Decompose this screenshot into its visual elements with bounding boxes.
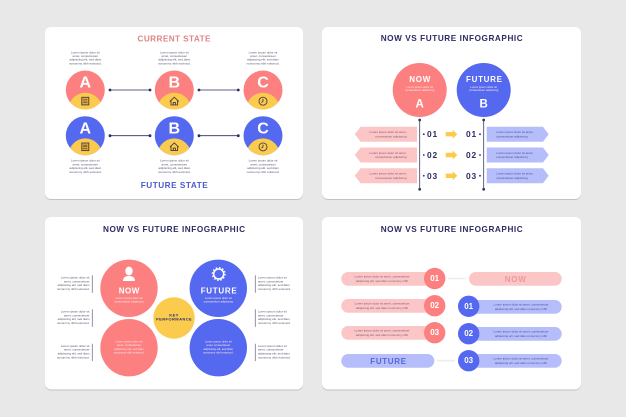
badge: future A: A [80,120,92,137]
right side notes: Lorem ipsum dolor sit [258,344,287,348]
circle: now detail: adipiscing elit, sed diam [114,347,145,351]
text block: top descriptions: nonummy nibh euismod. [158,61,191,65]
right blue pills: Lorem ipsum dolor sit amet, consectetuer [493,356,549,360]
heading: current state: CURRENT STATE [138,34,211,43]
left pink pills: Lorem ipsum dolor sit amet, consectetuer [354,328,410,332]
text block: top descriptions: adipiscing elit, sed diam [247,58,279,62]
circle: now A [393,63,447,117]
text block: top descriptions: Lorem ipsum dolor sit [249,50,278,54]
label pill: now: NOW [505,275,526,284]
circle: now: NOW [119,286,140,295]
text block: bottom descriptions: nonummy nibh euismod. [247,170,280,174]
right side notes: nonummy nibh euismod. [258,287,291,291]
badge: current B [154,70,194,110]
badge: future A [66,116,105,156]
icon: person [123,267,135,281]
title: NOW VS FUTURE INFOGRAPHIC [381,225,523,234]
circle: now: consectetuer adipiscing [114,299,144,303]
circle: now detail: nonummy nibh euismod. [114,351,144,355]
text block: bottom descriptions: adipiscing elit, sed diam [247,166,279,170]
text block: bottom descriptions: nonummy nibh euismod. [69,170,102,174]
numbers: 02 [466,150,477,160]
circle: future: consectetuer adipiscing [204,299,233,303]
text block: top descriptions: nonummy nibh euismod. [247,61,280,65]
left arrow labels: consectetuer adipiscing [375,134,407,138]
label pill: future: FUTURE [370,357,407,366]
circle: future B: FUTURE [466,75,503,84]
number circles: now [424,268,445,343]
numbers [427,129,477,181]
right arrow labels [487,127,549,183]
circle: now detail: amet, consectetuer [117,343,141,347]
badge: current B: B [169,75,180,92]
numbers: 02 [427,150,438,160]
badge: current A: A [80,75,92,92]
text block: bottom descriptions: amet, consectetuer [250,162,276,166]
number circles: now: 02 [430,301,440,310]
left arrow labels: consectetuer adipiscing [375,155,407,159]
left arrow labels [355,127,417,183]
left pink pills [341,272,434,340]
icon: clock [259,143,267,151]
left side notes: nonummy nibh euismod. [57,287,90,291]
title: NOW VS FUTURE INFOGRAPHIC [381,34,523,43]
right blue pills [469,300,562,368]
right blue pills: Lorem ipsum dolor sit amet, consectetuer [493,302,549,306]
badge: current C [244,70,282,110]
text block: top descriptions [69,50,280,65]
badge: future C [244,116,282,156]
numbers: 03 [427,171,438,181]
number circles: now: 01 [430,274,440,283]
numbers: 01 [466,129,477,139]
text block: bottom descriptions: Lorem ipsum dolor sit [71,159,100,163]
circle: key performance: KEY [169,312,179,317]
badge: future C: C [257,120,269,137]
left side notes: adipiscing elit, sed diam [58,352,90,356]
text block: top descriptions: adipiscing elit, sed diam [158,58,191,62]
text block: top descriptions: Lorem ipsum dolor sit [71,50,100,54]
text block: bottom descriptions [69,159,280,174]
left pink pills: adipiscing elit, sed diam nonummy nibh [356,306,409,310]
number dots [423,133,481,177]
numbers: 01 [427,129,438,139]
number circles: now: 03 [430,328,440,337]
circle: future detail: Lorem ipsum dolor sit [205,339,232,343]
circle: future detail: nonummy nibh euismod. [203,351,234,355]
left side notes: Lorem ipsum dolor sit [61,276,90,280]
badge: current C: C [257,75,269,92]
circle: now: Lorem ipsum dolor sit [116,296,143,300]
right arrow labels: Lorem ipsum dolor sit amet, [496,151,533,155]
text block: top descriptions: amet, consectetuer [162,54,187,58]
right side notes: amet, consectetuer [258,348,284,352]
badge: future B [154,116,194,156]
circle: now A: Lorem ipsum dolor sit [406,85,433,89]
left side notes: Lorem ipsum dolor sit [61,344,90,348]
right blue pills: adipiscing elit, sed diam nonummy nibh [495,334,548,338]
circle: now detail [100,319,158,376]
right side notes: adipiscing elit, sed diam [258,283,290,287]
left side notes: amet, consectetuer [64,279,90,283]
icon: house [170,97,179,105]
numbers: 03 [466,171,477,181]
right side notes: Lorem ipsum dolor sit [258,276,287,280]
circle: future B: Lorem ipsum dolor sit [470,85,497,89]
circle: now A: NOW [409,75,431,84]
left arrow labels: Lorem ipsum dolor sit amet, [369,151,407,155]
text block: bottom descriptions: Lorem ipsum dolor sit [160,159,189,163]
circle: future detail: adipiscing elit, sed diam [203,347,234,351]
icon: house [170,143,179,151]
right arrow labels: consectetuer adipiscing [496,176,528,180]
left side notes: adipiscing elit, sed diam [58,317,90,321]
right arrow labels: consectetuer adipiscing [496,155,528,159]
circle: future: Lorem ipsum dolor sit [205,296,232,300]
circle: key performance [153,297,195,339]
right side notes: adipiscing elit, sed diam [258,317,290,321]
circle: future B: consectetuer adipiscing [469,88,499,92]
circle: future: FUTURE [201,286,237,295]
text block: top descriptions: adipiscing elit, sed diam [69,58,102,62]
number circles: future: 03 [464,356,474,365]
right side notes: nonummy nibh euismod. [258,355,291,359]
icon: clock [259,97,267,105]
number circles: future: 01 [464,302,474,311]
left pink pills: adipiscing elit, sed diam nonummy nibh [356,279,409,283]
right blue pills: adipiscing elit, sed diam nonummy nibh [495,307,548,311]
text block: top descriptions: amet, consectetuer [250,54,276,58]
circle: future B: B [480,99,488,111]
left side notes: amet, consectetuer [64,313,90,317]
left side notes: Lorem ipsum dolor sit [61,310,90,314]
left side notes: adipiscing elit, sed diam [58,283,90,287]
circle: future detail: amet, consectetuer [206,343,230,347]
circle: future B [457,63,511,117]
right arrow labels: consectetuer adipiscing [496,134,528,138]
right blue pills: Lorem ipsum dolor sit amet, consectetuer [493,329,549,333]
label pill: now [469,272,562,286]
circle: now detail: Lorem ipsum dolor sit [116,339,143,343]
right side notes: amet, consectetuer [258,313,284,317]
icon: document [82,97,89,105]
arrows: state connectors [109,89,239,137]
right arrow labels: Lorem ipsum dolor sit amet, [496,172,533,176]
circle: now [100,260,158,317]
text block: bottom descriptions: Lorem ipsum dolor sit [249,159,278,163]
text block: bottom descriptions: amet, consectetuer [162,162,187,166]
badge: current A [66,70,105,110]
circle: future [190,260,247,317]
number circles: future [458,296,479,371]
text block: top descriptions: nonummy nibh euismod. [69,61,102,65]
icon: document [82,143,89,151]
text block: bottom descriptions: amet, consectetuer [73,162,98,166]
text block: top descriptions: amet, consectetuer [73,54,98,58]
left pink pills: Lorem ipsum dolor sit amet, consectetuer [354,301,410,305]
number circles: future: 02 [464,329,474,338]
left side notes [57,275,92,361]
circle: future detail [190,319,247,376]
label pill: future [341,354,434,368]
left pink pills: Lorem ipsum dolor sit amet, consectetuer [354,274,410,278]
text block: bottom descriptions: adipiscing elit, sed diam [158,166,191,170]
text block: bottom descriptions: adipiscing elit, sed diam [69,166,102,170]
right blue pills: adipiscing elit, sed diam nonummy nibh [495,361,548,365]
left side notes: nonummy nibh euismod. [57,321,90,325]
right side notes: Lorem ipsum dolor sit [258,310,287,314]
panel: numbered pills [322,217,581,390]
panel: now vs future arrows [322,27,581,200]
text block: top descriptions: Lorem ipsum dolor sit [160,50,189,54]
axis lines [419,119,485,190]
circle: now A: A [416,99,424,111]
right side notes: nonummy nibh euismod. [258,321,291,325]
yellow arrows [446,130,457,180]
right side notes [255,275,291,361]
left arrow labels: Lorem ipsum dolor sit amet, [369,172,407,176]
connectors [437,278,466,361]
icon: gear [212,268,225,280]
right side notes: adipiscing elit, sed diam [258,352,290,356]
left pink pills: adipiscing elit, sed diam nonummy nibh [356,333,409,337]
left side notes: nonummy nibh euismod. [57,355,90,359]
circle: key performance: PERFORMANCE [156,317,192,322]
panel: key performance [45,217,303,390]
circle: now A: consectetuer adipiscing [405,88,435,92]
title: NOW VS FUTURE INFOGRAPHIC [103,225,245,234]
left side notes: amet, consectetuer [64,348,90,352]
left arrow labels: consectetuer adipiscing [375,176,407,180]
panel: current vs future state [45,27,303,200]
right side notes: amet, consectetuer [258,279,284,283]
badge: future B: B [169,120,180,137]
left arrow labels: Lorem ipsum dolor sit amet, [369,130,407,134]
heading: future state: FUTURE STATE [141,181,208,190]
text block: bottom descriptions: nonummy nibh euismod. [158,170,191,174]
right arrow labels: Lorem ipsum dolor sit amet, [496,130,533,134]
